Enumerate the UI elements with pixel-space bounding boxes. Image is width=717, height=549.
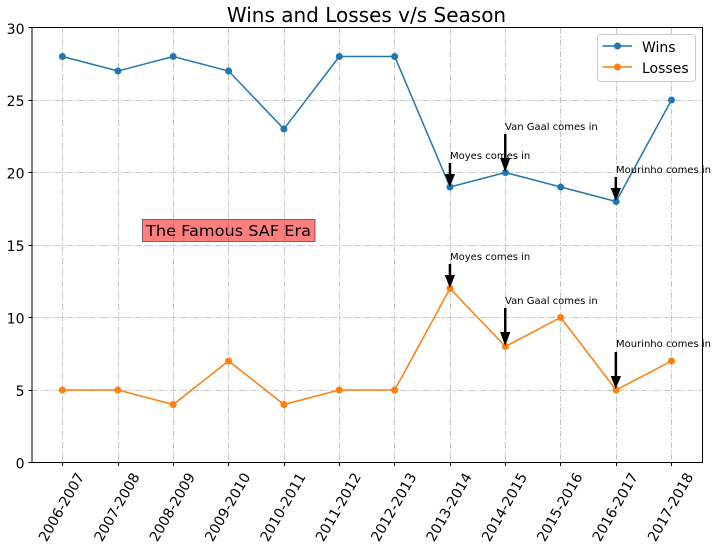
legend: Wins — [642, 40, 676, 56]
annotations: Van Gaal comes in — [505, 122, 598, 133]
x axis: 2010-2011 — [258, 470, 310, 545]
x axis: 2008-2009 — [147, 470, 199, 545]
x axis: 2007-2008 — [92, 470, 144, 545]
title: Wins and Losses v/s Season — [227, 3, 506, 27]
annotations: Van Gaal comes in — [505, 296, 598, 307]
annotations: Mourinho comes in — [616, 165, 711, 176]
x axis: 2014-2015 — [479, 470, 531, 545]
annotations: Moyes comes in — [450, 252, 530, 263]
annotations: Moyes comes in — [450, 151, 530, 162]
x axis: 2016-2017 — [590, 470, 642, 545]
x axis: 2009-2010 — [202, 470, 254, 545]
annotations: Mourinho comes in — [616, 339, 711, 350]
callout: The Famous SAF Era: The Famous SAF Era — [145, 222, 311, 240]
axes frame — [32, 28, 702, 462]
y axis — [7, 22, 32, 472]
x axis: 2015-2016 — [534, 470, 586, 545]
series: losses line — [59, 285, 675, 408]
y axis: 30 — [7, 22, 24, 38]
y axis: 10 — [7, 312, 24, 328]
arrows — [445, 134, 621, 389]
annotations — [450, 122, 711, 350]
x axis: 2006-2007 — [36, 470, 88, 545]
y axis: 5 — [16, 384, 24, 400]
x axis: 2011-2012 — [313, 470, 365, 545]
y axis: 25 — [7, 94, 24, 110]
y axis: 0 — [16, 456, 24, 472]
y axis: 15 — [7, 239, 24, 255]
x axis: 2013-2014 — [424, 470, 476, 545]
legend: Losses — [642, 61, 689, 77]
x axis — [36, 462, 697, 545]
series: wins line — [59, 53, 675, 205]
x axis: 2017-2018 — [645, 470, 697, 545]
y axis: 20 — [7, 166, 24, 182]
legend — [598, 34, 696, 82]
x axis: 2012-2013 — [368, 470, 420, 545]
